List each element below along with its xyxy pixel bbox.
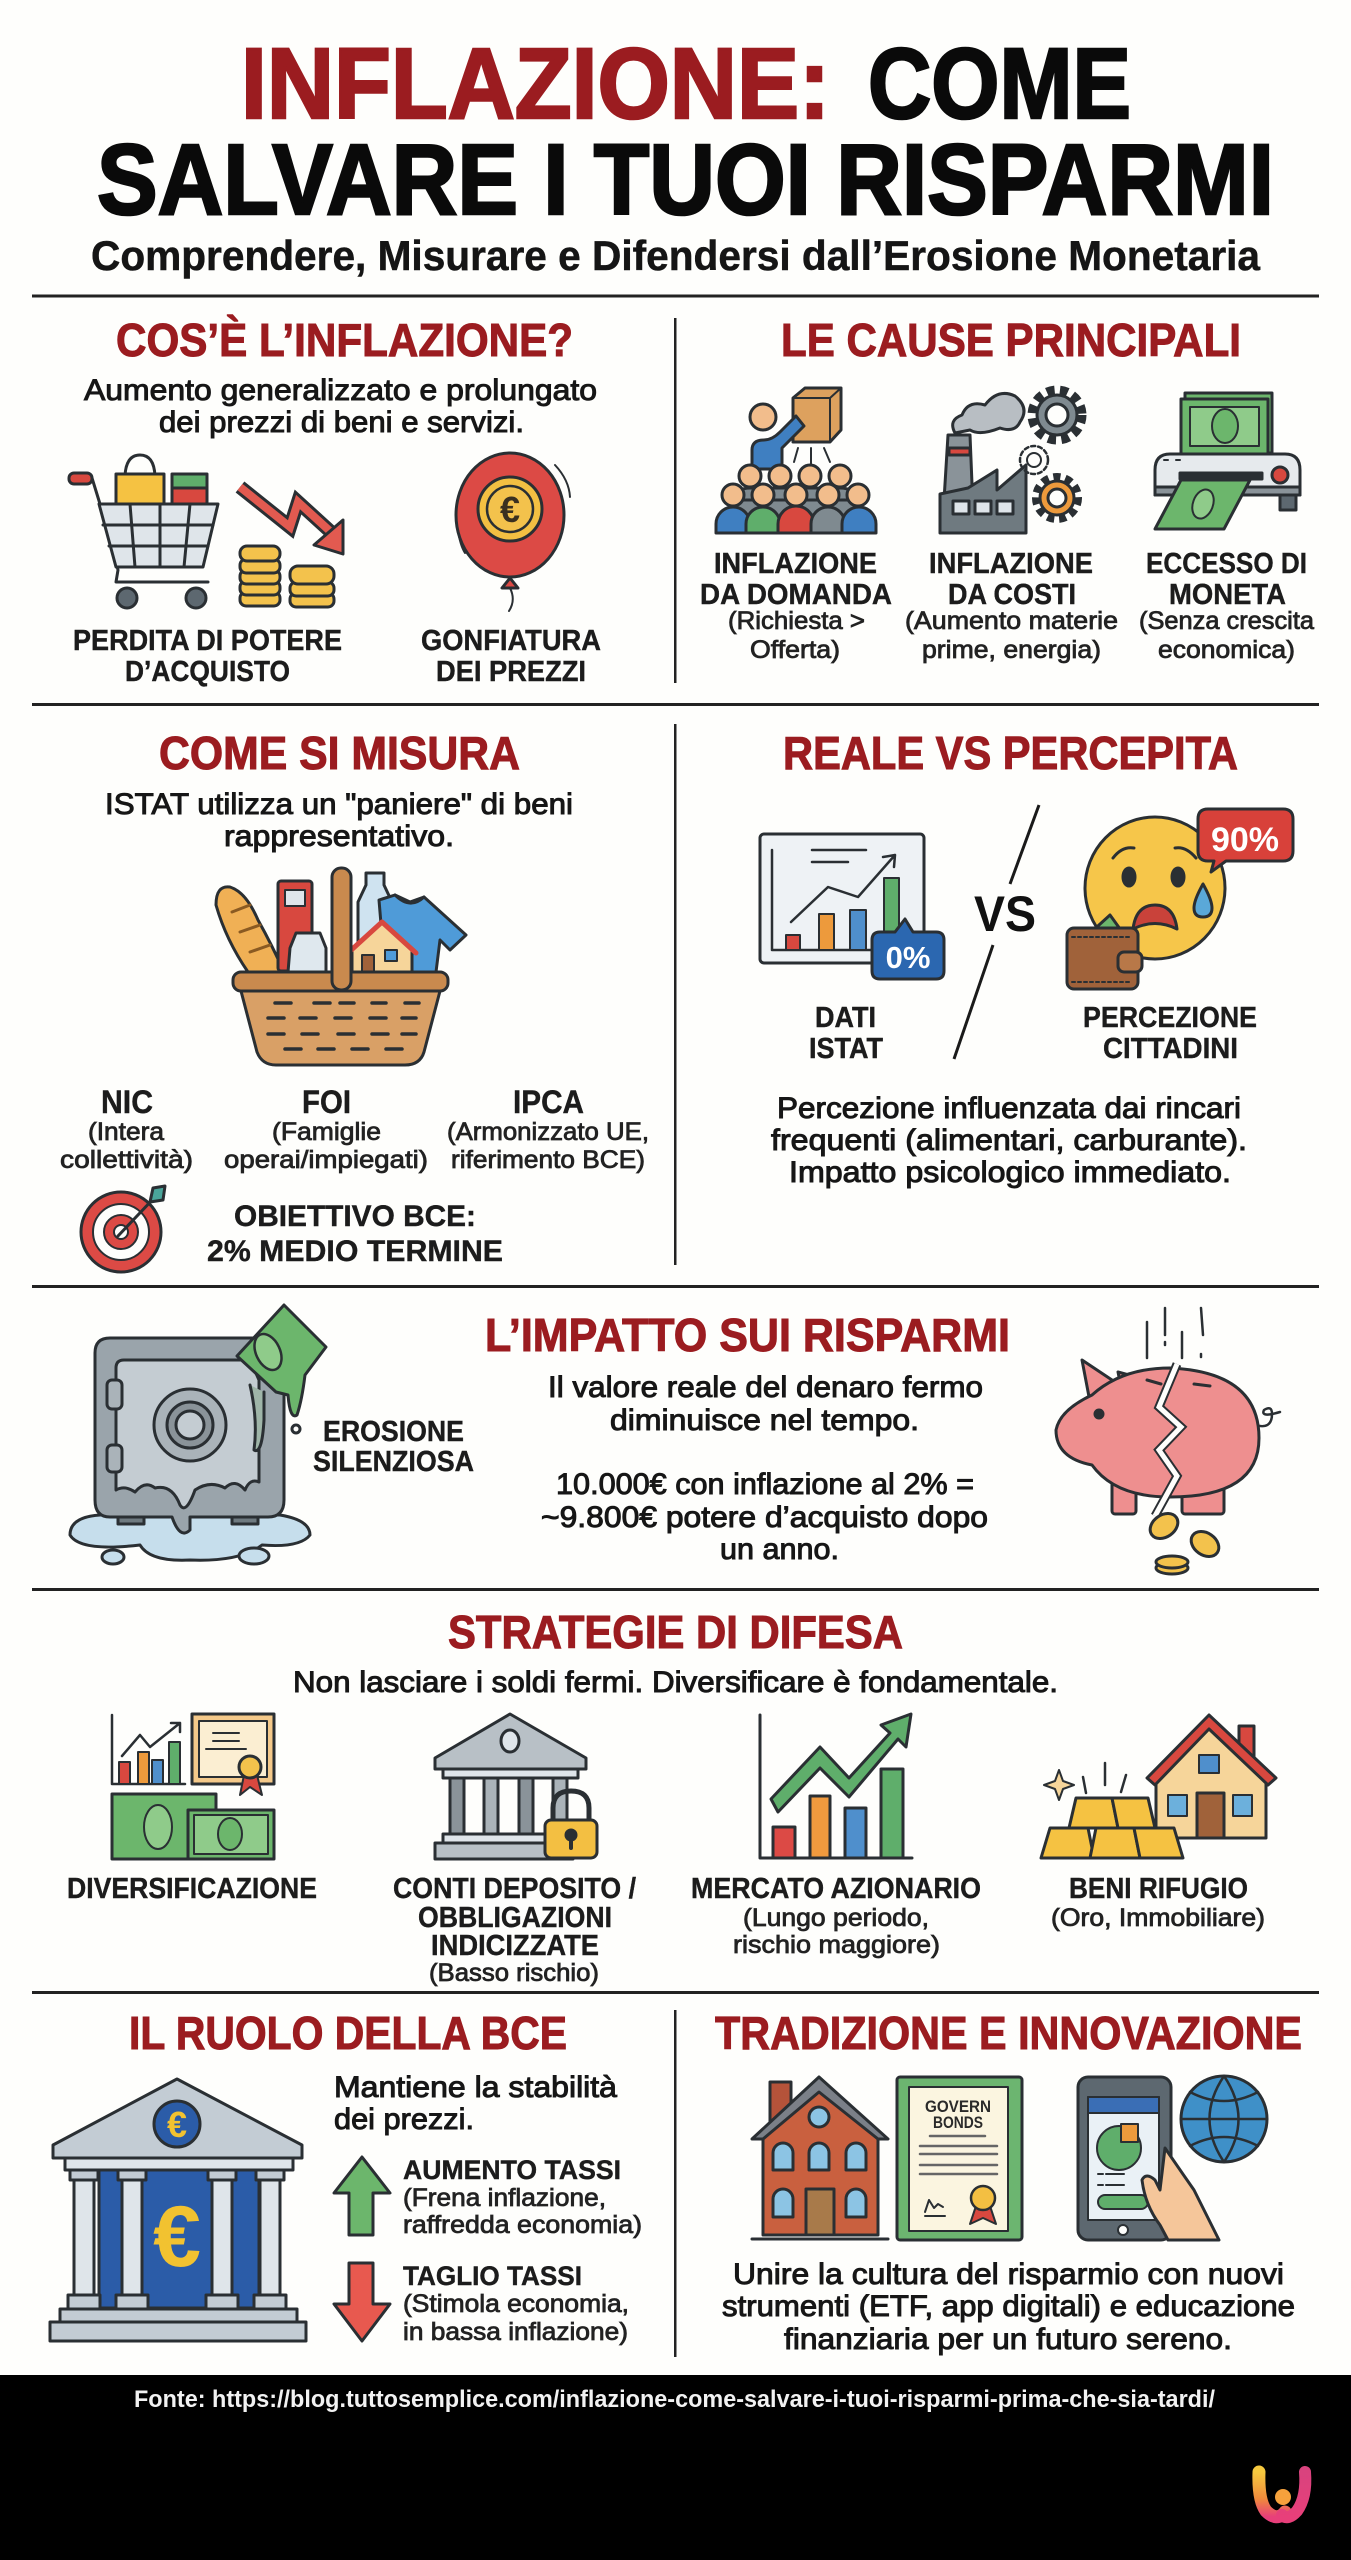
icon: melting safe: [70, 1305, 326, 1564]
value text: [548, 1371, 983, 1437]
obiettivo BCE: [207, 1200, 503, 1268]
icon: phone and globe: [1078, 2076, 1267, 2240]
perception text: frequenti (alimentari, carburante).: [771, 1124, 1247, 1157]
label: dati istat: [809, 1002, 883, 1065]
indice IPCA: [447, 1084, 649, 1174]
icon: government bonds certificate: [897, 2077, 1022, 2240]
icon: broken piggy bank: [1056, 1308, 1280, 1574]
aumento tassi text: raffredda economia): [403, 2211, 642, 2239]
label: beni rifugio: [1051, 1873, 1265, 1932]
taglio tassi text: in bassa inflazione): [403, 2318, 628, 2346]
label: eccesso di moneta: MONETA: [1169, 579, 1286, 611]
label: perdita di potere d'acquisto: PERDITA DI POTERE: [73, 625, 342, 657]
taglio tassi text: (Stimola economia,: [403, 2290, 629, 2318]
icon: worried face and wallet: 90%: [1211, 821, 1279, 859]
mission text: [334, 2071, 617, 2136]
indice NIC: NIC: [101, 1084, 153, 1120]
label: inflazione da domanda: [700, 548, 892, 664]
label: mercato azionario: (Lungo periodo,: [743, 1904, 929, 1932]
label: gonfiatura dei prezzi: [421, 625, 601, 688]
icon: balloon with euro: €: [500, 489, 520, 530]
label: inflazione da domanda: Offerta): [750, 636, 840, 664]
label: inflazione da costi: INFLAZIONE: [929, 548, 1093, 580]
icon: stock chart: [760, 1714, 912, 1858]
panel: le cause principali: [700, 314, 1314, 664]
indice IPCA: IPCA: [513, 1084, 584, 1120]
icon: arrow up: [334, 2157, 390, 2235]
panel: reale vs percepita: [760, 727, 1293, 1189]
source link: Fonte: https://blog.tuttosemplice.com/inflazione-come-salvare-i-tuoi-risparmi-prima-che-sia-tardi/: [134, 2386, 1215, 2413]
label: erosione silenziosa: EROSIONE: [323, 1416, 464, 1448]
indice FOI: FOI: [302, 1084, 351, 1120]
indice NIC: [60, 1084, 193, 1174]
mission text: dei prezzi.: [334, 2103, 474, 2136]
panel: strategie di difesa: [67, 1606, 1276, 1987]
label: dati istat: ISTAT: [809, 1033, 883, 1065]
label: inflazione da domanda: INFLAZIONE: [714, 548, 877, 580]
label: inflazione da domanda: DA DOMANDA: [700, 579, 892, 611]
subheading: Non lasciare i soldi fermi. Diversificare è fondamentale.: [293, 1666, 1058, 1699]
paniere text: [105, 788, 573, 853]
value text: Il valore reale del denaro fermo: [548, 1371, 983, 1404]
label: percezione cittadini: PERCEZIONE: [1083, 1002, 1257, 1034]
panel: il ruolo della BCE: [50, 2007, 642, 2346]
label: inflazione da costi: DA COSTI: [948, 579, 1076, 611]
heading: LE CAUSE PRINCIPALI: [781, 314, 1241, 366]
aumento tassi text: [403, 2155, 642, 2239]
footer: [0, 2375, 1351, 2560]
indice NIC: (Intera: [88, 1118, 164, 1146]
obiettivo BCE: 2% MEDIO TERMINE: [207, 1235, 503, 1268]
perception text: [771, 1092, 1247, 1189]
icon: money printer: [1155, 393, 1300, 529]
icon: logo: [1259, 2472, 1305, 2517]
label: erosione silenziosa: [313, 1416, 474, 1478]
example calculation: 10.000€ con inflazione al 2% =: [556, 1468, 974, 1501]
label: perdita di potere d'acquisto: [73, 625, 342, 688]
label: eccesso di moneta: ECCESSO DI: [1146, 548, 1307, 580]
label: eccesso di moneta: [1139, 548, 1314, 664]
title: INFLAZIONE:: [241, 28, 830, 140]
title: [97, 28, 1274, 236]
indice FOI: [224, 1084, 428, 1174]
icon: basket of goods: [216, 868, 466, 1065]
heading: REALE VS PERCEPITA: [783, 727, 1238, 779]
icon: falling arrow: [240, 487, 343, 554]
icon: coins: [240, 546, 334, 607]
label: inflazione da domanda: (Richiesta >: [728, 607, 865, 635]
obiettivo BCE: OBIETTIVO BCE:: [234, 1200, 476, 1233]
label: mercato azionario: [691, 1873, 981, 1959]
icon: central bank: €: [153, 2189, 201, 2285]
example calculation: un anno.: [720, 1533, 839, 1566]
tradition text: [722, 2258, 1295, 2356]
aumento tassi text: (Frena inflazione,: [403, 2184, 606, 2212]
heading: COS’È L’INFLAZIONE?: [116, 314, 573, 366]
label: inflazione da costi: (Aumento materie: [905, 607, 1118, 635]
divider with VS: VS: [974, 886, 1036, 942]
panel: impatto sui risparmi: [70, 1305, 1280, 1574]
icon: central bank: [50, 2079, 306, 2341]
icon: target: [81, 1186, 165, 1272]
definition text: dei prezzi di beni e servizi.: [159, 406, 524, 439]
label: eccesso di moneta: (Senza crescita: [1139, 607, 1314, 635]
indice FOI: operai/impiegati): [224, 1146, 428, 1174]
icon: balloon with euro: [456, 453, 570, 611]
label: conti deposito: CONTI DEPOSITO /: [393, 1873, 636, 1905]
label: diversificazione: DIVERSIFICAZIONE: [67, 1873, 317, 1905]
example calculation: ~9.800€ potere d’acquisto dopo: [541, 1501, 988, 1534]
icon: bank and padlock: [435, 1714, 597, 1859]
subtitle: Comprendere, Misurare e Difendersi dall’Erosione Monetaria: [91, 232, 1261, 279]
perception text: Impatto psicologico immediato.: [789, 1156, 1231, 1189]
label: gonfiatura dei prezzi: DEI PREZZI: [436, 656, 586, 688]
taglio tassi text: TAGLIO TASSI: [403, 2261, 582, 2291]
icon: chart with 0% badge: 0%: [886, 940, 930, 975]
definition text: Aumento generalizzato e prolungato: [84, 374, 597, 407]
mission text: Mantiene la stabilità: [334, 2071, 617, 2104]
example calculation: [541, 1468, 988, 1566]
icon: central bank: €: [167, 2104, 187, 2145]
tradition text: finanziaria per un futuro sereno.: [784, 2323, 1232, 2356]
label: dati istat: DATI: [815, 1002, 876, 1034]
heading: IL RUOLO DELLA BCE: [129, 2007, 567, 2059]
panel: cos'è l'inflazione: [69, 314, 601, 688]
label: inflazione da costi: [905, 548, 1118, 664]
label: mercato azionario: MERCATO AZIONARIO: [691, 1873, 981, 1905]
icon: crowd demand: [716, 388, 876, 533]
tradition text: Unire la cultura del risparmio con nuovi: [733, 2258, 1284, 2291]
indice IPCA: (Armonizzato UE,: [447, 1118, 649, 1146]
label: conti deposito: (Basso rischio): [429, 1959, 599, 1987]
label: eccesso di moneta: economica): [1158, 636, 1295, 664]
paniere text: ISTAT utilizza un "paniere" di beni: [105, 788, 573, 821]
heading: TRADIZIONE E INNOVAZIONE: [715, 2007, 1302, 2059]
icon: brick house: [752, 2077, 888, 2239]
icon: worried face and wallet: [1067, 809, 1293, 989]
panel: come si misura: [60, 727, 649, 1272]
label: perdita di potere d'acquisto: D’ACQUISTO: [125, 656, 290, 688]
heading: L’IMPATTO SUI RISPARMI: [485, 1309, 1010, 1361]
paniere text: rappresentativo.: [224, 820, 454, 853]
indice FOI: (Famiglie: [272, 1118, 381, 1146]
value text: diminuisce nel tempo.: [610, 1404, 919, 1437]
label: mercato azionario: rischio maggiore): [733, 1931, 940, 1959]
icon: government bonds certificate: GOVERN: [925, 2097, 991, 2116]
tradition text: strumenti (ETF, app digitali) e educazione: [722, 2290, 1295, 2323]
label: erosione silenziosa: SILENZIOSA: [313, 1446, 474, 1478]
indice IPCA: riferimento BCE): [451, 1146, 645, 1174]
label: percezione cittadini: CITTADINI: [1103, 1033, 1238, 1065]
label: beni rifugio: BENI RIFUGIO: [1069, 1873, 1248, 1905]
heading: COME SI MISURA: [159, 727, 520, 779]
icon: chart with 0% badge: [760, 834, 944, 979]
label: beni rifugio: (Oro, Immobiliare): [1051, 1904, 1265, 1932]
taglio tassi text: [403, 2261, 629, 2346]
definition text: [84, 374, 597, 439]
divider with VS: [954, 805, 1039, 1059]
icon: government bonds certificate: BONDS: [933, 2113, 983, 2132]
label: inflazione da costi: prime, energia): [922, 636, 1101, 664]
label: percezione cittadini: [1083, 1002, 1257, 1065]
icon: shopping cart: [69, 455, 218, 608]
panel: tradizione e innovazione: [715, 2007, 1302, 2356]
label: conti deposito: OBBLIGAZIONI: [418, 1902, 612, 1934]
title: COME: [868, 28, 1131, 140]
label: gonfiatura dei prezzi: GONFIATURA: [421, 625, 601, 657]
aumento tassi text: AUMENTO TASSI: [403, 2155, 621, 2185]
icon: factory and gears: [940, 390, 1082, 533]
label: conti deposito: [393, 1873, 636, 1987]
indice NIC: collettività): [60, 1146, 193, 1174]
icon: diversification: [112, 1714, 274, 1859]
icon: gold and house: [1041, 1715, 1276, 1858]
icon: arrow down: [334, 2263, 390, 2341]
heading: STRATEGIE DI DIFESA: [448, 1606, 903, 1658]
perception text: Percezione influenzata dai rincari: [777, 1092, 1241, 1125]
label: conti deposito: INDICIZZATE: [431, 1930, 599, 1962]
